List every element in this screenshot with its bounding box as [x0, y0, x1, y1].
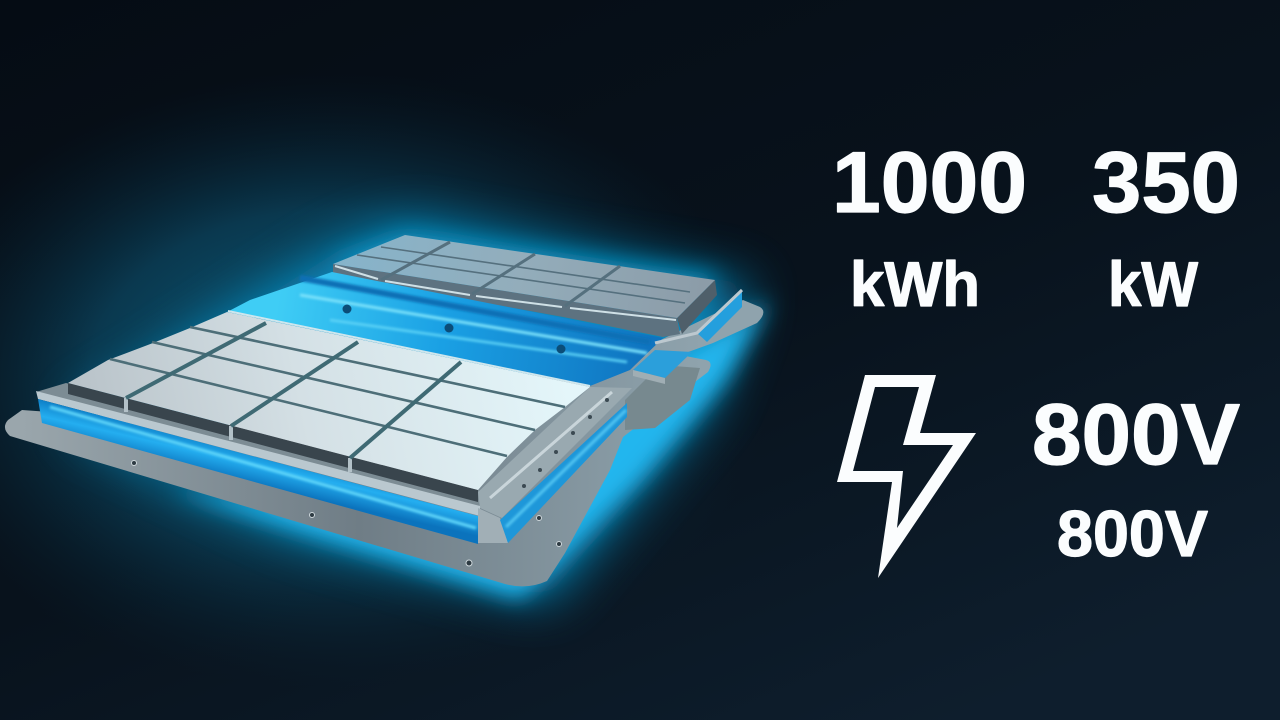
front top rail: [36, 391, 480, 516]
stat: 350 kW: 350: [1092, 135, 1240, 231]
base plate: [5, 300, 763, 586]
row gaps: [110, 327, 565, 456]
stat: 800V large: 800V: [1032, 387, 1240, 483]
front blue band: [38, 399, 478, 544]
stat: 350 kW: [1092, 135, 1240, 320]
back edge rail: [228, 311, 590, 386]
stat: 1000 kWh: [832, 135, 1027, 320]
front corner post: [478, 508, 508, 543]
front battery cells grid: [68, 311, 590, 490]
right blue band: [500, 403, 627, 543]
rear block front face: [333, 264, 680, 337]
cell surface: [68, 312, 590, 490]
side rivets: [522, 398, 609, 488]
rear block end face: [677, 280, 717, 334]
battery glow: [0, 0, 800, 720]
rear battery cells: [333, 235, 717, 337]
front right side metal: [478, 387, 632, 518]
icon: lightning bolt: [837, 375, 976, 578]
channel bolts: [342, 304, 566, 354]
rear block dividers: [357, 242, 690, 306]
connector block: [633, 350, 692, 384]
stat: 350 kW: kW: [1108, 250, 1199, 320]
side metal shading: [490, 392, 612, 498]
plate bolts: [132, 460, 562, 566]
column gaps: [126, 323, 461, 458]
battery pack illustration: [5, 235, 763, 586]
rear block top: [333, 235, 715, 318]
middle blue channel: [227, 272, 663, 386]
rear block highlights: [335, 266, 676, 320]
rear right metal joint: [655, 290, 742, 343]
front block wall: [36, 383, 480, 510]
stat: 1000 kWh: kWh: [850, 250, 980, 320]
front wall posts: [126, 398, 350, 472]
front block cell faces: [68, 383, 478, 502]
rear right blue side: [697, 290, 742, 342]
stat: 1000 kWh: 1000: [832, 135, 1027, 231]
stat: 800V small: 800V: [1057, 497, 1208, 570]
connector metal housing: [625, 365, 700, 430]
